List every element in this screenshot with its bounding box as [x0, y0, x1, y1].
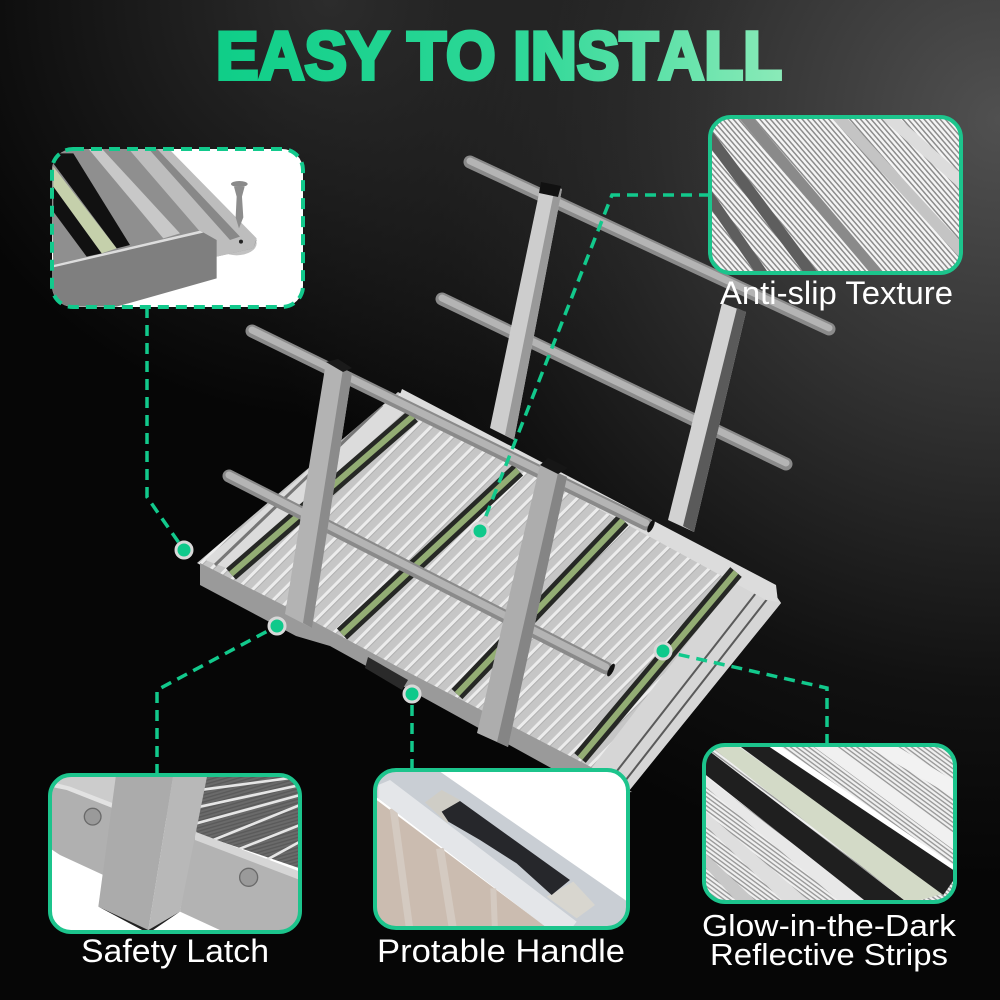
back lip	[398, 389, 778, 602]
bolts	[84, 808, 258, 886]
leader lines	[147, 195, 827, 775]
label: reflective strips	[702, 908, 957, 972]
strip 2	[342, 470, 518, 634]
front handrail	[229, 330, 656, 747]
front lower rail	[229, 475, 616, 677]
front top rail	[252, 330, 656, 533]
label: reflective strips: Glow-in-the-Dark	[702, 908, 957, 943]
screw	[231, 181, 248, 228]
front left post	[285, 362, 352, 628]
strip 3	[457, 520, 623, 694]
ramp deck	[197, 389, 785, 795]
strip 1	[231, 416, 413, 574]
leader: anti-slip	[480, 195, 710, 531]
back left post	[490, 184, 562, 440]
marker dots	[176, 523, 671, 702]
label: reflective strips: Reflective Strips	[710, 937, 948, 972]
label: safety latch: Safety Latch	[81, 933, 269, 969]
label: portable handle: Protable Handle	[377, 933, 625, 969]
leader: handle	[410, 693, 414, 770]
strip 4	[580, 572, 736, 758]
back upper rail	[470, 161, 829, 329]
front right post	[477, 465, 567, 747]
leader: bracket	[147, 307, 184, 550]
panel: anti-slip texture	[707, 115, 967, 278]
leader: latch	[157, 626, 277, 775]
outer deck bands	[205, 395, 785, 795]
leader: strips	[663, 651, 827, 745]
panel: reflective strips	[702, 745, 958, 903]
panel: screw bracket	[50, 147, 303, 307]
handle grip	[442, 801, 570, 895]
handle on ramp	[365, 657, 408, 690]
back right post	[668, 303, 746, 532]
title: EASY TO INSTALL	[216, 18, 782, 94]
back handrail	[442, 161, 829, 532]
back lower rail	[442, 298, 786, 464]
label: anti-slip texture: Anti-slip Texture	[720, 275, 953, 311]
panel: portable handle	[370, 770, 630, 935]
back post cap	[539, 182, 561, 197]
panel: safety latch	[50, 775, 300, 933]
front lip	[200, 563, 632, 795]
deck surface	[197, 392, 781, 792]
